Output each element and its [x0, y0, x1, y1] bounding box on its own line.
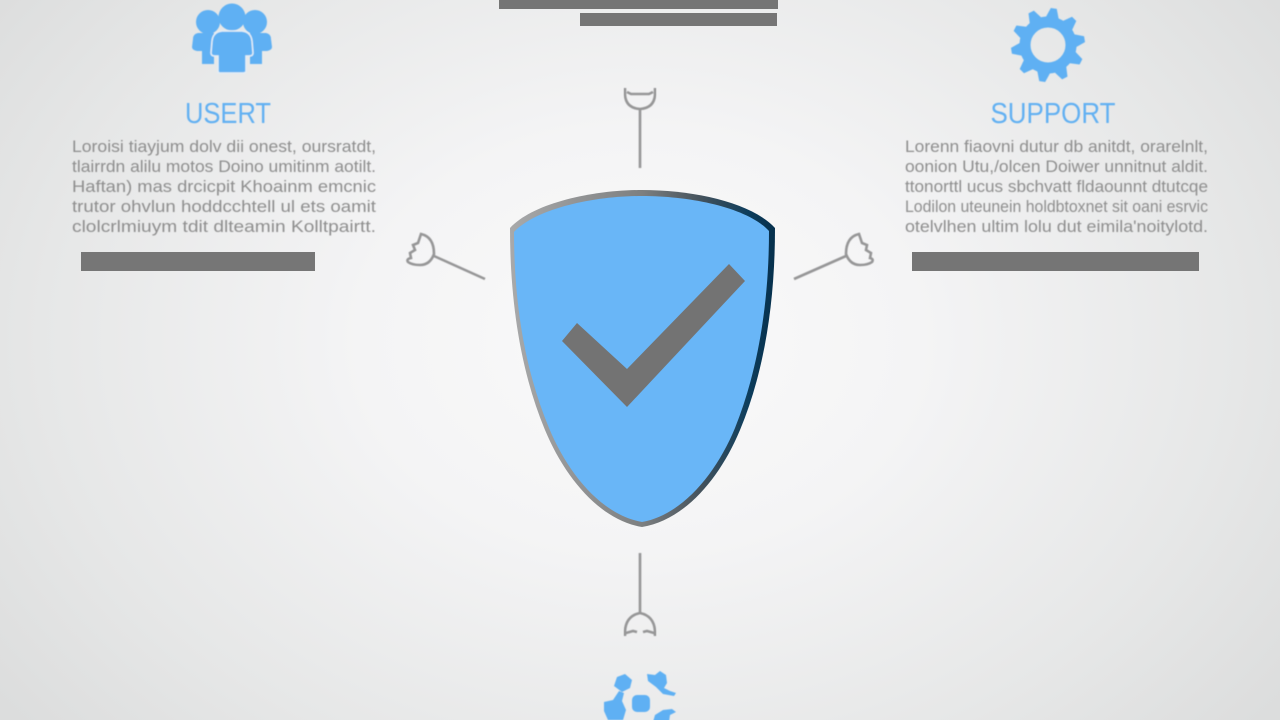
text block: support: otelvlhen ultim lolu dut eimila'noitylotd.: [905, 217, 1208, 236]
text block: support: oonion Utu,/olcen Doiwer unnitnut aldit.: [905, 157, 1208, 176]
text block: support: Lodilon uteunein holdbtoxnet sit oani esrvic: [905, 197, 1208, 216]
text block: user: clolcrlmiuym tdit dlteamin Kolltpairtt.: [72, 217, 376, 236]
shield fill: [514, 196, 769, 522]
check mark: [562, 264, 745, 407]
text block: user: [72, 137, 377, 236]
icon: gear: [1010, 7, 1086, 83]
text block: support: Lorenn fiaovni dutur db anitdt, orarelnlt,: [905, 137, 1208, 156]
connector: left: [407, 234, 485, 279]
connector: bottom: [625, 553, 655, 636]
text block: support: ttonorttl ucus sbchvatt fldaounnt dtutcqe: [905, 177, 1208, 196]
shield: [510, 190, 775, 527]
text block: user: trutor ohvlun hoddcchtell ul ets oamit: [72, 197, 376, 216]
heading: usert: USERT: [185, 98, 271, 130]
icon: users: [192, 4, 272, 73]
heading: support: SUPPORT: [990, 98, 1116, 130]
bar: user: [81, 252, 315, 271]
panel: support: [905, 7, 1208, 271]
text block: support: [905, 137, 1208, 236]
text block: user: Loroisi tiayjum dolv dii onest, oursratdt,: [72, 137, 376, 156]
connector: right: [794, 234, 873, 279]
panel: user: [72, 4, 377, 271]
top bars: [499, 0, 778, 26]
text block: user: Haftan) mas drcicpit Khoainm emcnic: [72, 177, 377, 196]
connector: top: [625, 88, 655, 168]
icon: bottom gear: [604, 671, 676, 720]
icon: shield with check: [510, 190, 775, 527]
bar: support: [912, 252, 1199, 271]
text block: user: tlairrdn alilu motos Doino umitinm aotilt.: [72, 157, 376, 176]
